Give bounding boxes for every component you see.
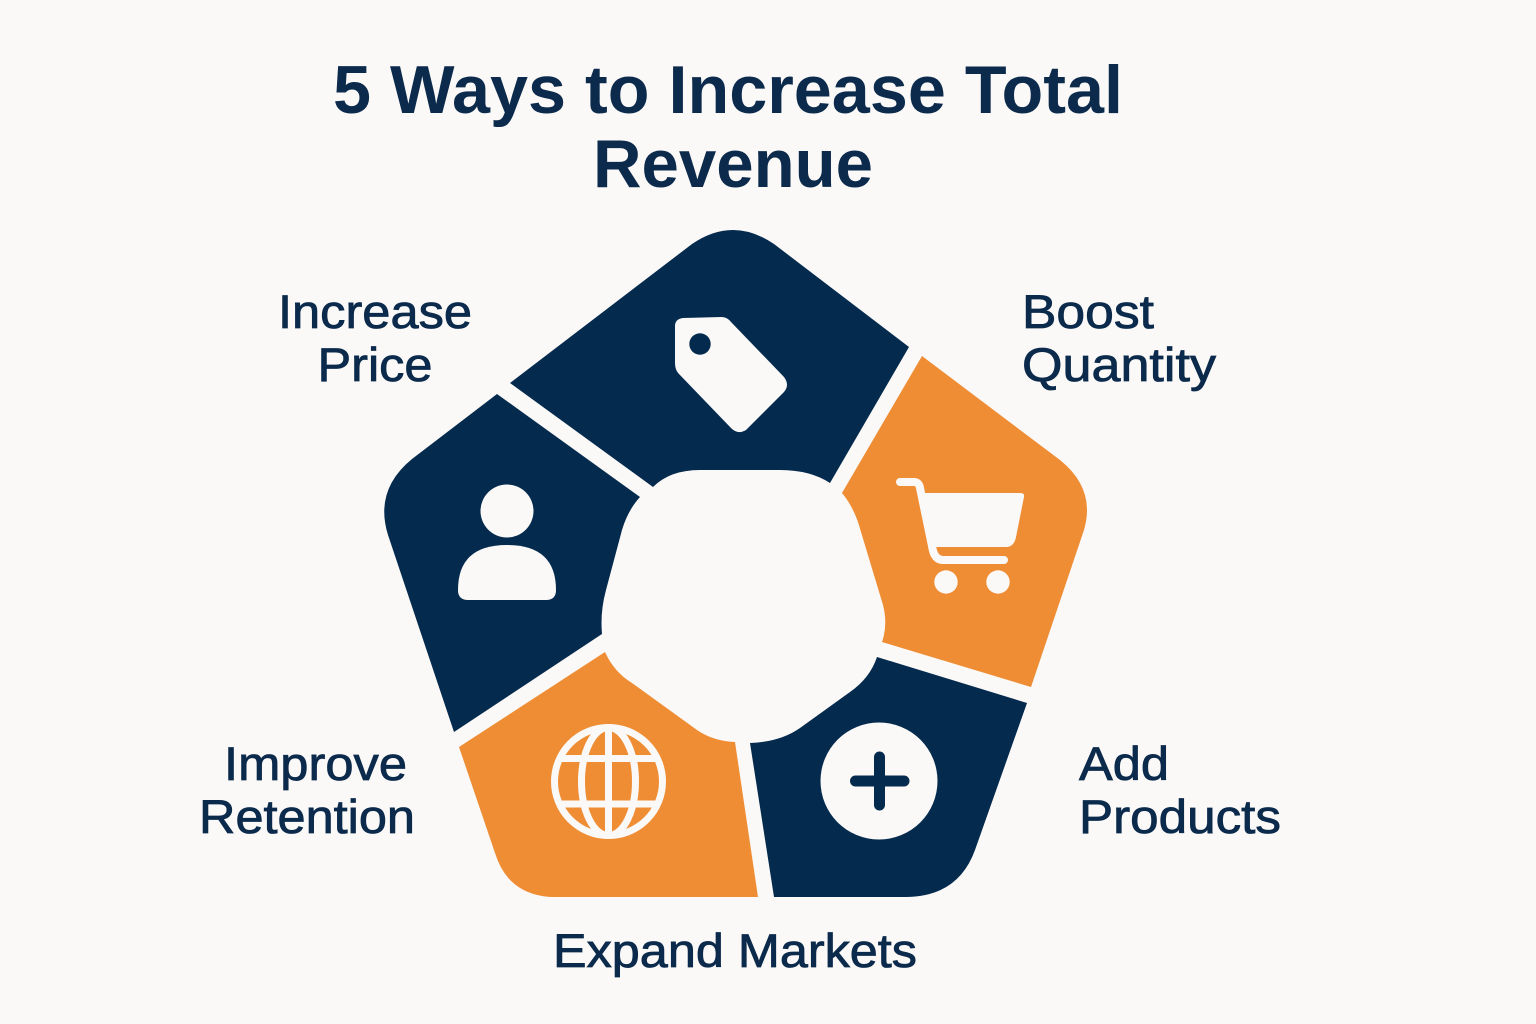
icon: person: [458, 484, 556, 600]
icon: price tag: [675, 317, 787, 432]
panel: increase price segment: [510, 230, 909, 487]
label: add products: Add: [1079, 737, 1169, 790]
label: add products: [1079, 737, 1281, 843]
icon: plus circle: [820, 722, 938, 840]
label: boost quantity: Boost: [1022, 285, 1154, 338]
panel: expand markets segment: [459, 652, 758, 897]
label: improve retention: Retention: [199, 790, 415, 843]
label: add products: Products: [1079, 790, 1281, 843]
label: improve retention: Improve: [224, 737, 407, 790]
label: increase price: Price: [318, 338, 432, 391]
label: boost quantity: Quantity: [1022, 338, 1217, 391]
label: boost quantity: [1022, 285, 1217, 391]
panel: boost quantity segment: [842, 356, 1087, 687]
title: Revenue: [593, 126, 873, 202]
title: 5 Ways to Increase Total: [333, 52, 1123, 128]
icon: shopping cart: [900, 482, 1024, 594]
label: increase price: [278, 285, 472, 391]
label: expand markets: Expand Markets: [553, 924, 917, 977]
icon: globe: [554, 727, 662, 836]
panel: improve retention segment: [384, 394, 640, 732]
title: [333, 52, 1123, 202]
label: improve retention: [199, 737, 415, 843]
label: increase price: Increase: [278, 285, 472, 338]
panel: add products segment: [750, 657, 1027, 897]
